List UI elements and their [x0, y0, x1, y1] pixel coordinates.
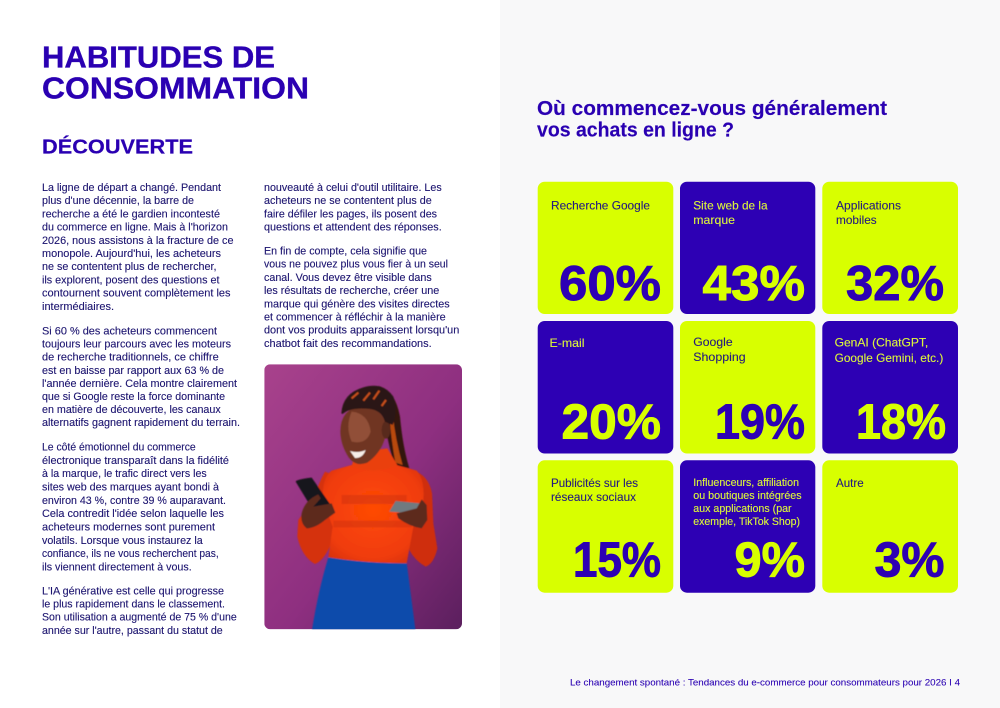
- footer: Le changement spontané : Tendances du e-commerce pour consommateurs pour 2026 I 4: [570, 676, 960, 688]
- card: Recherche Google 60%: [538, 182, 673, 314]
- card: Publicités sur les réseaux sociaux 15%: 15%: [573, 534, 661, 588]
- card: Applications mobiles 32%: Applications: [836, 200, 901, 212]
- paragraph 5: [264, 182, 442, 234]
- card: Google Shopping 19%: Google: [693, 336, 733, 349]
- paragraph 2: alternatifs gagnent rapidement du terrain.: [42, 417, 240, 429]
- paragraph 5: questions et attendent des réponses.: [264, 222, 442, 234]
- heading: survey question: [537, 97, 887, 142]
- paragraph 6: [264, 246, 459, 350]
- paragraph 2: toujours leur parcours avec les moteurs: [42, 339, 231, 351]
- paragraph 2: l'année dernière. Cela montre clairement: [42, 378, 237, 390]
- paragraph 6: dont vos produits apparaissent lorsqu'un: [264, 325, 459, 337]
- paragraph 5: faire défiler les pages, ils posent des: [264, 208, 437, 220]
- title: [42, 40, 309, 105]
- paragraph 6: et commencer à réfléchir à la manière: [264, 312, 446, 324]
- card: Recherche Google 60%: Recherche Google: [551, 200, 650, 212]
- paragraph 3: confiance, ils ne vous recherchent pas,: [42, 548, 219, 560]
- paragraph 6: En fin de compte, cela signifie que: [264, 246, 427, 258]
- paragraph 1: monopole. Aujourd'hui, les acheteurs: [42, 248, 221, 260]
- paragraph 6: canal. Vous devez être visible dans: [264, 272, 432, 284]
- card: Influenceurs 9%: aux applications (par: [693, 503, 792, 515]
- paragraph 3: Cela contredit l'idée selon laquelle les: [42, 508, 224, 520]
- paragraph 4: Son utilisation a augmenté de 75 % d'une: [42, 612, 237, 624]
- card: Influenceurs 9%: ou boutiques intégrées: [693, 490, 802, 502]
- photo: woman shopping with phone and bank card: [264, 364, 462, 632]
- card: GenAI 18%: Google Gemini, etc.): [835, 352, 943, 365]
- paragraph 3: électronique transparaît dans la fidélité: [42, 455, 229, 467]
- paragraph 5: nouveauté à celui d'outil utilitaire. Les: [264, 182, 442, 194]
- face: [340, 406, 387, 464]
- paragraph 1: [42, 182, 234, 313]
- paragraph 3: ils viennent directement à vous.: [42, 562, 192, 574]
- left sleeve: [297, 472, 337, 564]
- sweater ribbing: [333, 495, 412, 527]
- paragraph 4: [42, 586, 237, 637]
- paragraph 6: chatbot fait des recommandations.: [264, 338, 432, 350]
- heading: découverte: DÉCOUVERTE: [42, 136, 193, 159]
- right hand: [397, 499, 427, 528]
- panel: left page background: [0, 0, 500, 708]
- card: Google Shopping 19%: [680, 321, 815, 454]
- text block: right column: [264, 182, 459, 350]
- smile: [350, 450, 366, 458]
- paragraph 1: ils explorent, posent des questions et: [42, 274, 220, 286]
- paragraph 2: [42, 326, 240, 429]
- paragraph 3: sites web des marques ayant bondi à: [42, 482, 219, 494]
- paragraph 3: Le côté émotionnel du commerce: [42, 442, 196, 454]
- right sleeve: [407, 471, 437, 567]
- paragraph 6: vous ne pouvez plus vous fier à un seul: [264, 259, 448, 271]
- phone: [296, 478, 330, 511]
- left hand: [301, 494, 335, 528]
- card: Site web de la marque 43%: [680, 182, 815, 314]
- paragraph 3: acheteurs modernes sont purement: [42, 522, 215, 534]
- paragraph 2: Si 60 % des acheteurs commencent: [42, 326, 217, 338]
- card: Autre 3%: [822, 460, 958, 593]
- panel: right page background: [500, 0, 1000, 708]
- paragraph 1: recherche a été le gardien incontesté: [42, 208, 220, 220]
- sweater body: [323, 465, 424, 563]
- card: Publicités sur les réseaux sociaux 15%: réseaux sociaux: [551, 491, 636, 504]
- neck: [352, 448, 398, 466]
- card: Influenceurs 9%: [680, 460, 815, 593]
- card: Applications mobiles 32%: 32%: [846, 257, 944, 311]
- card: E-mail 20%: E-mail: [550, 337, 584, 350]
- paragraph 2: que si Google reste la force dominante: [42, 391, 225, 403]
- paragraph 1: La ligne de départ a changé. Pendant: [42, 182, 221, 194]
- paragraph 3: environ 43 %, contre 39 % auparavant.: [42, 495, 226, 507]
- paragraph 6: marque qui génère des visites directes: [264, 298, 450, 310]
- card: Google Shopping 19%: 19%: [715, 395, 805, 449]
- title: HABITUDES DE: [42, 40, 275, 74]
- card: GenAI 18%: 18%: [856, 395, 946, 449]
- card: Applications mobiles 32%: [822, 182, 958, 314]
- card: Applications mobiles 32%: mobiles: [836, 214, 877, 227]
- bank card: [389, 501, 421, 513]
- heading: survey question: vos achats en ligne ?: [537, 119, 734, 142]
- paragraph 6: les résultats de recherche, créer une: [264, 285, 439, 297]
- card: Google Shopping 19%: Shopping: [693, 351, 746, 364]
- card: GenAI 18%: [822, 321, 958, 454]
- paragraph 1: intermédiaires.: [42, 301, 114, 313]
- paragraph 5: acheteurs ne se contentent plus de: [264, 195, 432, 207]
- card: Autre 3%: 3%: [874, 534, 944, 588]
- skirt: [312, 557, 416, 632]
- card: Site web de la marque 43%: 43%: [702, 257, 805, 311]
- card: Site web de la marque 43%: marque: [693, 214, 735, 227]
- paragraph 4: année sur l'autre, passant du statut de: [42, 625, 223, 637]
- paragraph 2: en matière de découverte, les canaux: [42, 404, 221, 416]
- paragraph 1: ne se contentent plus de rechercher,: [42, 261, 217, 273]
- paragraph 1: contournent souvent complètement les: [42, 288, 230, 300]
- card: E-mail 20%: 20%: [562, 395, 661, 449]
- card: E-mail 20%: [538, 321, 673, 454]
- card: GenAI 18%: GenAI (ChatGPT,: [835, 336, 928, 350]
- paragraph 2: de recherche traditionnels, ce chiffre: [42, 352, 219, 364]
- paragraph 3: volatils. Lorsque vous instaurez la: [42, 535, 203, 547]
- paragraph 1: plus d'une décennie, la barre de: [42, 195, 194, 207]
- card: Publicités sur les réseaux sociaux 15%: [538, 460, 673, 593]
- paragraph 1: du commerce en ligne. Mais à l'horizon: [42, 222, 228, 234]
- card: Influenceurs 9%: Influenceurs, affiliation: [693, 477, 799, 489]
- card: Recherche Google 60%: 60%: [559, 257, 661, 311]
- title: CONSOMMATION: [42, 70, 309, 105]
- card: Publicités sur les réseaux sociaux 15%: Publicités sur les: [551, 477, 638, 490]
- paragraph 1: 2026, nous assistons à la fracture de ce: [42, 235, 234, 247]
- paragraph 4: L'IA générative est celle qui progresse: [42, 586, 224, 598]
- heading: survey question: Où commencez-vous généralement: [537, 97, 887, 120]
- paragraph 4: le plus rapidement dans le classement.: [42, 599, 225, 611]
- braids: [378, 386, 409, 468]
- paragraph 2: est en baisse par rapport aux 63 % de: [42, 365, 224, 377]
- card: Influenceurs 9%: 9%: [734, 534, 805, 588]
- card: Influenceurs 9%: exemple, TikTok Shop): [693, 516, 800, 528]
- card: Autre 3%: Autre: [836, 477, 864, 490]
- text block: left column: [42, 182, 240, 637]
- paragraph 3: à la marque, le trafic direct vers les: [42, 468, 207, 480]
- ear: [382, 421, 390, 439]
- paragraph 3: [42, 442, 229, 574]
- card: Site web de la marque 43%: Site web de la: [693, 200, 768, 212]
- hair: [341, 386, 396, 425]
